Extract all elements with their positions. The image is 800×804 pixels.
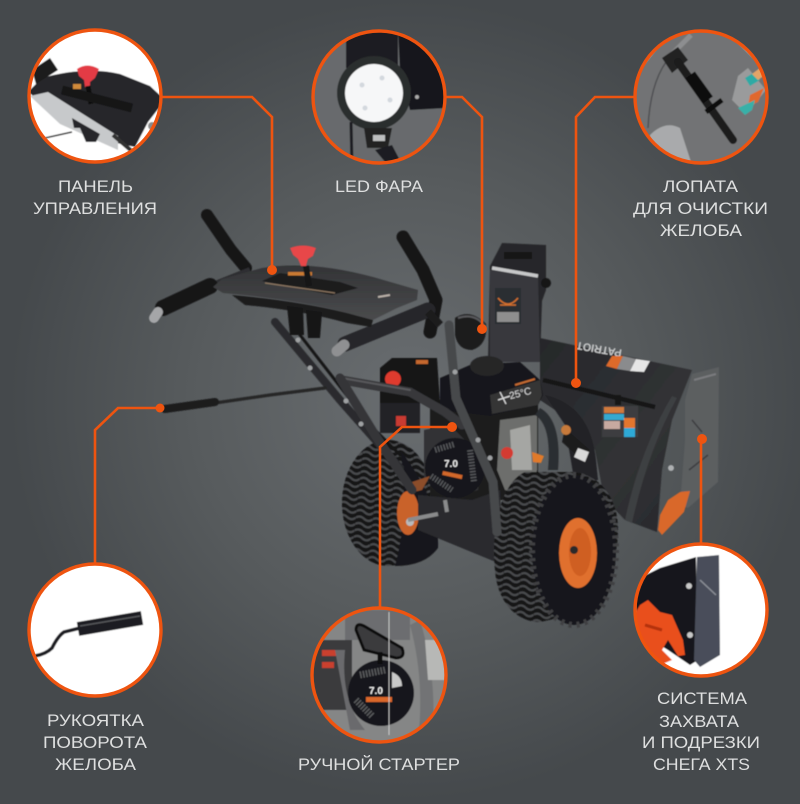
label: control panel: УПРАВЛЕНИЯ — [33, 200, 157, 218]
line: chute handle — [95, 408, 160, 566]
axle lever — [408, 500, 447, 520]
temperature mark: -25°C — [505, 386, 533, 403]
label: XTS system: СНЕГА XTS — [653, 756, 750, 774]
label: chute rotation handle: ПОВОРОТА — [43, 734, 147, 752]
brackets — [287, 306, 304, 335]
starter badge: 7.0 — [444, 459, 458, 470]
orange hub — [559, 518, 597, 588]
housing sticker — [602, 406, 638, 437]
control panel — [213, 246, 418, 338]
label: LED headlight: LED ФАРА — [335, 178, 423, 196]
housing stripe — [606, 356, 623, 369]
side plate — [668, 367, 719, 508]
engine body — [430, 400, 559, 500]
fuel tank — [440, 356, 543, 416]
frame bolts — [296, 338, 492, 460]
callout: manual starter: 7.0 — [369, 686, 383, 697]
label: chute shovel: ЖЕЛОБА — [660, 222, 742, 240]
recoil starter — [412, 425, 485, 498]
headlight — [455, 314, 486, 350]
line: XTS — [700, 439, 702, 545]
orange skid shoe — [658, 491, 690, 535]
label: XTS system: ЗАХВАТА — [659, 713, 739, 731]
housing brand text: PATRIOT — [575, 339, 623, 358]
right grip — [337, 310, 440, 351]
frame tubes — [215, 322, 497, 532]
left rear wheel — [342, 440, 438, 566]
callout: LED headlight — [310, 28, 450, 170]
chute rotation handle — [165, 402, 215, 409]
right lever — [403, 237, 436, 332]
chute — [488, 243, 551, 362]
line: starter — [380, 427, 452, 609]
red knob — [290, 246, 316, 266]
connector lines and dots — [95, 97, 701, 609]
chute sticker — [495, 288, 521, 324]
label: XTS system: И ПОДРЕЗКИ — [642, 734, 760, 752]
line: LED headlight — [445, 97, 482, 329]
left lever — [207, 215, 246, 268]
callout: control panel — [25, 25, 165, 165]
label: chute shovel — [633, 178, 768, 240]
label: chute rotation handle — [43, 712, 147, 774]
label: control panel — [33, 178, 157, 218]
chute cleaning shovel rod — [543, 380, 655, 407]
label: chute shovel: ДЛЯ ОЧИСТКИ — [633, 200, 768, 218]
label: control panel: ПАНЕЛЬ — [58, 178, 133, 196]
anchor dots — [156, 265, 707, 444]
small warning sticker — [562, 428, 590, 463]
label: chute rotation handle: ЖЕЛОБА — [55, 756, 136, 774]
auger housing — [540, 338, 692, 532]
control box with red button — [380, 358, 440, 433]
label: chute shovel: ЛОПАТА — [663, 178, 738, 196]
label: XTS system — [642, 690, 760, 774]
callout: manual starter — [310, 605, 450, 745]
snowblower machine — [154, 215, 719, 625]
label: manual starter: РУЧНОЙ СТАРТЕР — [298, 755, 460, 774]
frame base plate — [418, 490, 503, 565]
line: control panel — [160, 97, 272, 270]
label: chute rotation handle: РУКОЯТКА — [47, 712, 144, 730]
front wheel — [494, 472, 618, 625]
label: XTS system: СИСТЕМА — [657, 690, 747, 708]
left grip — [154, 270, 250, 318]
callout: XTS system — [630, 540, 775, 680]
line: shovel — [576, 97, 636, 383]
callout: chute shovel — [630, 28, 775, 168]
callout: chute rotation handle — [25, 560, 165, 700]
